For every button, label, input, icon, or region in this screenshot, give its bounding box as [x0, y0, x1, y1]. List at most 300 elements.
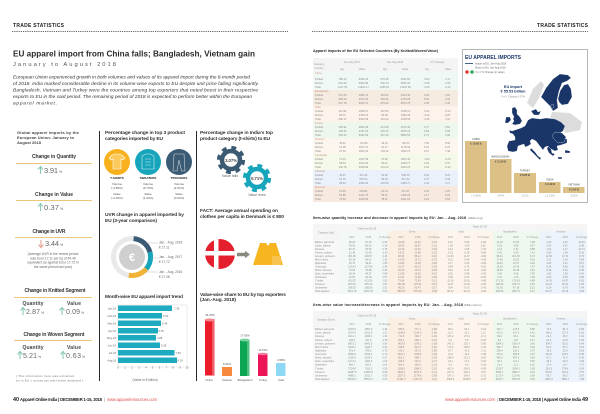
table: value by category: 67.1: [546, 357, 551, 360]
table: value by category: 9253.7: [496, 378, 503, 381]
table: value by category: Jerseys, pullovers: [315, 342, 335, 345]
table: quantity by category: 205.72: [512, 283, 520, 286]
change in woven segment: 5.21: [23, 353, 37, 360]
table: quantity by category: -2.93: [480, 283, 486, 286]
table: quantity by category: 96.12: [447, 290, 454, 293]
table: apparel imports by selected countries: 4371.60: [359, 98, 368, 101]
icon: Denmark flag: [205, 239, 235, 269]
table: value by category: 497.3: [513, 357, 519, 360]
table: value by category: 22.9: [514, 364, 518, 367]
table: apparel imports by selected countries: 2043.23: [401, 166, 410, 169]
category: sweaters: (6.74%): [143, 186, 153, 190]
table: quantity by category: 2.34: [563, 258, 568, 262]
table: apparel imports by selected countries: 42.37: [339, 174, 346, 177]
table: apparel imports by selected countries: 3.65: [424, 130, 429, 133]
change in knitted segment: 2.87: [26, 309, 40, 316]
heading: clothes per capita in Denmark is € 800: [200, 214, 284, 220]
table 1 background: [313, 58, 458, 202]
table: quantity by category: 2119.16: [348, 290, 356, 293]
table: value by category: 216.3: [513, 349, 519, 352]
table: quantity by category: 21.06: [365, 252, 372, 254]
table: quantity by category: 13.71: [414, 258, 421, 262]
table: quantity by category: 12.63: [546, 255, 552, 258]
table: value by category: -2.20: [431, 367, 437, 370]
table: value by category: 93.7: [546, 374, 551, 377]
table 2 background: 2018: [415, 236, 421, 239]
EU import total: Y-o-Y Change 0.37%: [501, 94, 526, 98]
change in UVR: Change in UVR: [32, 229, 66, 235]
table: apparel imports by selected countries: 3975.40: [401, 126, 410, 129]
panel: top 3 product categories: [104, 130, 192, 200]
table: quantity by category: 6.28: [546, 286, 551, 290]
table: quantity by category: 11.08: [398, 272, 404, 276]
table: value by category: 318.5: [398, 346, 404, 349]
table: quantity by category: 30.61: [464, 280, 470, 282]
table: quantity by category: 1.17: [563, 248, 568, 251]
table: apparel imports by selected countries: 3840.18: [359, 126, 368, 129]
table: value by category: 41.8: [464, 349, 469, 352]
horizontal bar chart: 3: [138, 366, 140, 370]
intro paragraph: [13, 74, 259, 106]
table: quantity by category: 3.41: [563, 244, 568, 248]
table: value by category: 4986.2: [348, 374, 356, 377]
table: quantity by category: 563.42: [348, 283, 356, 286]
table: value by category: 237.6: [414, 349, 421, 352]
table: quantity by category: 6.36: [579, 269, 584, 272]
table: quantity by category: 15.26: [496, 266, 503, 268]
table: quantity by category: 97.15: [365, 241, 372, 244]
heading: Month-wise EU apparel import trend: [105, 294, 183, 300]
table: value by category: Suits, ensembles: [315, 360, 334, 363]
heading: (Jan.-Aug. 2018): [200, 297, 236, 303]
panel: month-wise import trend: [105, 294, 189, 382]
table: value by category: 1931.4: [512, 342, 520, 345]
table: quantity by category: 11.27: [447, 283, 453, 286]
table: apparel imports by selected countries: -1.17: [445, 78, 450, 81]
table: value by category: 1214.3: [414, 332, 421, 335]
table: value by category: 258.1: [414, 339, 421, 342]
table: quantity by category: 61.27: [398, 266, 404, 268]
table: quantity by category: 6.12: [448, 241, 453, 244]
table: value by category: 602.4: [447, 367, 454, 370]
table: value by category: 71.4: [563, 357, 568, 360]
table 2 background: China: [409, 230, 416, 234]
table: value by category: 42.7: [448, 349, 453, 352]
table: quantity by category: Suits, ensembles: [315, 272, 334, 276]
change in UVR: [15, 229, 92, 269]
change in knitted segment: Change in Knitted Segment: [24, 288, 86, 294]
heading: EU (3-year comparison): [105, 218, 157, 224]
import bars: 5.62%: [570, 194, 578, 198]
3D bar chart: 36.40%: [205, 313, 215, 317]
table: quantity by category: 1.02: [546, 248, 551, 251]
table: apparel imports by selected countries: 1442.75: [359, 194, 368, 197]
table: apparel imports by selected countries: 0.34: [424, 166, 429, 169]
table: value by category: 213.5: [513, 328, 519, 331]
table: value by category: 312.4: [414, 346, 421, 349]
horizontal bar chart: Jun-18: [108, 344, 117, 348]
table: value by category: 0.99: [382, 342, 387, 345]
table: apparel imports by selected countries: 354.22: [339, 134, 346, 137]
table: quantity by category: 9.04: [448, 286, 453, 290]
table: quantity by category: -3.96: [431, 262, 437, 265]
table: value by category: 48.2: [546, 360, 551, 363]
icon: shirt: [253, 243, 283, 265]
table: quantity by category: -3.17: [431, 286, 437, 290]
table: quantity by category: 298.15: [348, 286, 356, 290]
3D bar chart: Bangladesh: [238, 378, 253, 382]
table: value by category: 0.34: [382, 346, 387, 349]
table: value by category: 3.60: [530, 374, 535, 377]
horizontal bar chart: Feb-18: [107, 314, 117, 318]
table: quantity by category: 104.83: [512, 255, 520, 258]
table: quantity by category: -2.66: [431, 276, 437, 279]
horizontal bar chart: 5.38: [161, 344, 167, 348]
donut chart: €: [129, 252, 135, 264]
table: quantity by category: 19.48: [513, 269, 519, 272]
table: quantity by category: 4.15: [546, 241, 551, 244]
horizontal bar chart: 7.83: [176, 351, 181, 355]
table: value by category: 8.6: [514, 339, 518, 342]
table: value by category: 6.41: [579, 357, 584, 360]
column dividers: [100, 131, 196, 381]
map title: EU APPAREL IMPORTS: [465, 55, 522, 61]
donut legend: € 17.72: [159, 260, 170, 264]
table: apparel imports by selected countries: 59.03: [381, 178, 388, 181]
left page footer: Apparel Online India | DECEMBER 1-15, 2018: [20, 397, 103, 402]
table: apparel imports by selected countries: -0.87: [445, 114, 450, 117]
table: quantity by category: 4.89: [530, 280, 535, 282]
table: value by category: 3.60: [530, 342, 535, 345]
table 1 background: Category: [314, 62, 325, 66]
table: value by category: 501.2: [398, 357, 404, 360]
table: value by category: 3866.7: [512, 371, 520, 374]
table: value by category: 698.7: [414, 335, 421, 338]
subtitle: January to August 2018: [13, 62, 116, 68]
table: quantity by category: 2.17: [448, 262, 453, 265]
table: quantity by category: 97.18: [513, 286, 519, 290]
table 2 background: Vietnam: [556, 230, 566, 234]
table: quantity by category: 8.33: [579, 252, 584, 254]
table: apparel imports by selected countries: 7.50: [424, 142, 429, 145]
table: apparel imports by selected countries: Morocco: [315, 186, 325, 189]
table 2 background: Bangladesh: [503, 230, 517, 234]
table: apparel imports by selected countries: 781.63: [402, 142, 409, 145]
table: quantity by category: Total apparel: [315, 290, 329, 293]
table: value by category: 1823.3: [545, 378, 553, 381]
change in UVR: %: [60, 243, 63, 247]
table 3 background: Major EU 28: [473, 312, 488, 316]
table 3 heading: (Million Euro): [464, 303, 482, 307]
table 3 background: 2018: [562, 323, 569, 326]
3D bar chart: 5.93%: [223, 362, 231, 366]
table: value by category: 304.7: [546, 342, 552, 345]
table: value by category: 240.2: [464, 371, 470, 374]
table: apparel imports by selected countries: 9573.76: [401, 102, 410, 105]
table: apparel imports by selected countries: 2.26: [424, 190, 429, 193]
table: quantity by category: -2.82: [480, 290, 486, 293]
table: value by category: 6.2: [449, 339, 452, 342]
table 3 background: 2018: [464, 323, 470, 326]
table: quantity by category: -3.13: [431, 283, 437, 286]
table: apparel imports by selected countries: Woven: [315, 162, 323, 165]
table: quantity by category: 2.36: [546, 269, 551, 272]
table: value by category: 3012.8: [365, 332, 372, 335]
table: value by category: 542.3: [562, 371, 568, 374]
table: quantity by category: [315, 241, 585, 293]
table: value by category: 1851.3: [365, 328, 372, 331]
table: apparel imports by selected countries: 3238.55: [401, 118, 410, 121]
table: quantity by category: 53.92: [365, 248, 372, 251]
panel: UVR change: [105, 212, 184, 279]
table: value by category: 4.61: [530, 332, 535, 335]
category: t-shirts: Value: [113, 192, 121, 196]
table: value by category: 6941.5: [365, 342, 372, 345]
table: value by category: 0.57: [382, 357, 387, 360]
table: quantity by category: 40.12: [414, 241, 421, 244]
table: value by category: 1214.6: [512, 374, 520, 377]
table: apparel imports by selected countries: Cambodia: [315, 154, 327, 157]
table: quantity by category: 5.57: [530, 244, 535, 248]
table: quantity by category: 9.33: [497, 244, 502, 248]
table: quantity by category: 86.20: [398, 286, 404, 290]
table: quantity by category: 579.36: [414, 290, 421, 293]
table: value by category: 364.2: [398, 364, 404, 367]
icon: gear value rises: [245, 166, 269, 197]
table: apparel imports by selected countries: 3.30: [445, 134, 450, 137]
table: quantity by category: 196.84: [496, 283, 503, 286]
table: quantity by category: 96.24: [349, 241, 355, 244]
table: quantity by category: 8.14: [546, 266, 551, 268]
category: sweaters: SWEATERS: [140, 176, 156, 180]
table: apparel imports by selected countries: 367.40: [381, 134, 388, 137]
donut legend: € 17.11: [159, 246, 170, 250]
table: apparel imports by selected countries: 879.04: [360, 178, 367, 181]
table: quantity by category: 6.76: [563, 286, 568, 290]
horizontal bar chart: 2: [131, 366, 133, 370]
table: quantity by category: 90.16: [562, 290, 568, 293]
table: value by category: 241.3: [447, 342, 454, 345]
table: quantity by category: 3.91: [382, 290, 387, 293]
import bars: INDIA: [547, 178, 554, 182]
table: apparel imports by selected countries: 153.72: [381, 130, 388, 133]
import bars: VIETNAM: [568, 182, 580, 186]
table: apparel imports by selected countries: 86.71: [339, 114, 346, 117]
table: value by category: 2106.3: [348, 357, 356, 360]
table 1 heading: Apparel Imports of the EU Selected Countries (By Knitted/Woven/Value): [313, 49, 439, 53]
table: quantity by category: Dresses: [315, 248, 324, 251]
import bars: € 6.85 B: [520, 173, 530, 177]
change in woven segment: Change in Woven Segment: [24, 332, 85, 338]
table: apparel imports by selected countries: 131.23: [381, 166, 388, 169]
table: apparel imports by selected countries: Pakistan: [315, 170, 325, 173]
heading: [105, 130, 185, 142]
table: apparel imports by selected countries: Bangladesh: [315, 90, 329, 93]
table: quantity by category: 74.06: [349, 269, 355, 272]
donut legend: [144, 240, 182, 279]
table: apparel imports by selected countries: Total: [315, 182, 320, 185]
table: value by category: -3.42: [480, 328, 486, 331]
table: quantity by category: 35.87: [414, 244, 421, 248]
icon: gear value falls: [219, 148, 243, 178]
icon: gear value falls: Value falls: [222, 174, 238, 178]
table 3 background: % Change: [477, 323, 490, 326]
table: value by category: 143.6: [464, 374, 470, 377]
table: value by category: Shirts, blouses: [315, 357, 331, 360]
table: quantity by category: 2.46: [382, 269, 387, 272]
table: quantity by category: 0.76: [464, 266, 469, 268]
table: quantity by category: 48.75: [349, 262, 355, 265]
table: apparel imports by selected countries: 609.13: [381, 82, 388, 85]
table: quantity by category: 12.45: [496, 262, 503, 265]
category: t-shirts: (-4.89%): [111, 186, 123, 190]
table: quantity by category: 18.52: [513, 258, 519, 262]
horizontal bar chart: 5: [152, 366, 154, 370]
table: quantity by category: -9.68: [480, 252, 486, 254]
intro paragraph: exports to EU in the said period. The remaining period of 2018 is expected to perform better within the European: [13, 94, 252, 100]
table: value by category: 2871.6: [414, 371, 421, 374]
table: apparel imports by selected countries: 1417.56: [338, 86, 347, 89]
table: value by category: 18.7: [563, 364, 568, 367]
table: value by category: 8.8: [465, 364, 469, 367]
table 3 background: 2017: [448, 323, 454, 326]
table: value by category: -3.56: [480, 342, 486, 345]
change in quantity: Change in Quantity: [32, 154, 76, 160]
map legend: [465, 62, 507, 74]
table: apparel imports by selected countries: 1390.30: [359, 182, 368, 185]
table: apparel imports by selected countries: Turkey: [315, 122, 323, 125]
table 2 background: Major EU 28: [473, 226, 488, 228]
table: value by category: 147.3: [447, 374, 454, 377]
table 2 background: 2018: [513, 236, 519, 239]
table 2 background: % Change: [428, 236, 440, 239]
table: quantity by category: 11.20: [497, 241, 503, 244]
table: apparel imports by selected countries: 97.50: [339, 150, 346, 153]
table: apparel imports by selected countries: 130.78: [339, 166, 346, 169]
table: value by category: 482.6: [496, 357, 503, 360]
table: apparel imports by selected countries: 64.27: [381, 146, 388, 149]
table: value by category: Gloves, mittens: [315, 339, 332, 342]
category: trousers: Value: [175, 192, 183, 196]
table: apparel imports by selected countries: 56.07: [381, 194, 388, 197]
table: quantity by category: -7.16: [480, 248, 486, 251]
table: value by category: 1.46: [382, 328, 387, 331]
table: quantity by category: -3.11: [431, 280, 437, 282]
table: value by category: 208.4: [496, 349, 503, 352]
table: value by category: -2.51: [480, 374, 486, 377]
table: quantity by category: 2.19: [382, 244, 387, 248]
table: quantity by category: 8.66: [563, 266, 568, 268]
left page footer: [13, 397, 158, 403]
change in knitted segment: Value: [67, 301, 81, 307]
table: apparel imports by selected countries: Total: [315, 86, 320, 89]
table: quantity by category: 6.14: [530, 290, 535, 293]
table: apparel imports by selected countries: 4.39: [445, 178, 450, 181]
table: quantity by category: 13.89: [414, 252, 421, 254]
table: quantity by category: 0.62: [546, 276, 551, 279]
table: value by category: 1342.7: [397, 353, 405, 356]
table: value by category: 22.4: [464, 360, 469, 363]
table: quantity by category: 6.56: [579, 244, 584, 248]
column intro: European Union: January to: [17, 135, 75, 140]
right page footer: |: [497, 397, 498, 402]
table: value by category: 9573.8: [512, 378, 520, 381]
import bars: € 11.00 B: [495, 160, 506, 164]
table: quantity by category: T-shirts: [315, 280, 323, 282]
table 2 background: 2018: [562, 236, 569, 239]
horizontal bar chart: 0: [117, 366, 119, 370]
table: quantity by category: 6.55: [579, 280, 584, 282]
table: apparel imports by selected countries: 3.46: [445, 102, 450, 105]
table: quantity by category: -4.00: [480, 269, 486, 272]
table: value by category: 11247.9: [413, 378, 422, 381]
table: value by category: [315, 328, 584, 381]
horizontal bar chart: (Value in € billion): [132, 378, 158, 382]
table: quantity by category: 127.86: [365, 266, 372, 268]
table 3 background: India: [458, 318, 464, 320]
table: apparel imports by selected countries: 379.45: [339, 94, 346, 97]
category: sweaters: [135, 149, 161, 200]
table: value by category: 1.06: [382, 360, 387, 363]
import bars: € 2.55 B: [569, 188, 579, 192]
table: quantity by category: 6.67: [579, 262, 584, 265]
table: value by category: 248.3: [398, 360, 404, 363]
horizontal bar chart: 8: [172, 366, 174, 370]
table: quantity by category: 1.82: [546, 272, 551, 276]
table: value by category: 1084.6: [365, 360, 372, 363]
horizontal bar chart: 6: [159, 366, 161, 370]
category: trousers: (4.51%): [174, 186, 184, 190]
table: value by category: Underwear: [315, 374, 327, 377]
table: quantity by category: 98.21: [496, 255, 503, 258]
title: EU apparel import from China falls; Bangladesh, Vietnam gain: [13, 50, 255, 58]
table: apparel imports by selected countries: 6.02: [424, 174, 429, 177]
table: quantity by category: 2.21: [546, 258, 551, 262]
EU import total: EU Import: [504, 85, 523, 89]
horizontal bar chart: 9: [179, 366, 181, 370]
table: value by category: 712.5: [398, 335, 404, 338]
table: quantity by category: 40.27: [365, 272, 372, 276]
right page footer: DECEMBER 1-15, 2018 | Apparel Online India: [499, 397, 582, 402]
table: quantity by category: 12.06: [447, 255, 454, 258]
table: value by category: 1174.8: [414, 374, 421, 377]
table: apparel imports by selected countries: 57.16: [339, 178, 346, 181]
table: value by category: 6.69: [579, 328, 584, 331]
table: apparel imports by selected countries: 6084.95: [359, 82, 368, 85]
table 3 background: 2018: [366, 323, 372, 326]
table: value by category: -7.98: [480, 353, 486, 356]
table: value by category: 6873.2: [348, 342, 356, 345]
table: quantity by category: 13.62: [398, 262, 404, 265]
table 3 background: % Change: [527, 323, 539, 326]
table: apparel imports by selected countries: 1103.47: [359, 146, 368, 149]
table: apparel imports by selected countries: 675.93: [381, 102, 388, 105]
table: quantity by category: 2.09: [464, 262, 469, 265]
table: apparel imports by selected countries: 3.04: [424, 162, 429, 165]
table: apparel imports by selected countries: 2.99: [445, 130, 450, 133]
intro paragraph: European Union experienced growth in both volumes and values of its apparel import during the 8-month period: [13, 74, 250, 80]
change in UVR: the same period last year): [34, 265, 72, 269]
table: apparel imports by selected countries: Knitted: [315, 126, 323, 129]
table: value by category: 261.3: [546, 367, 552, 370]
table: value by category: 0.64: [530, 371, 535, 374]
table: quantity by category: 4.18: [530, 262, 535, 265]
category: trousers: Volume: [174, 182, 184, 186]
table: apparel imports by selected countries: 4.53: [445, 94, 450, 97]
table: value by category: 32.2: [464, 332, 469, 335]
change in UVR: equivalent as against Euro 17.72 in: [27, 260, 79, 264]
change in UVR: was Euro 17.11 per kg of 54.46: [30, 256, 76, 260]
